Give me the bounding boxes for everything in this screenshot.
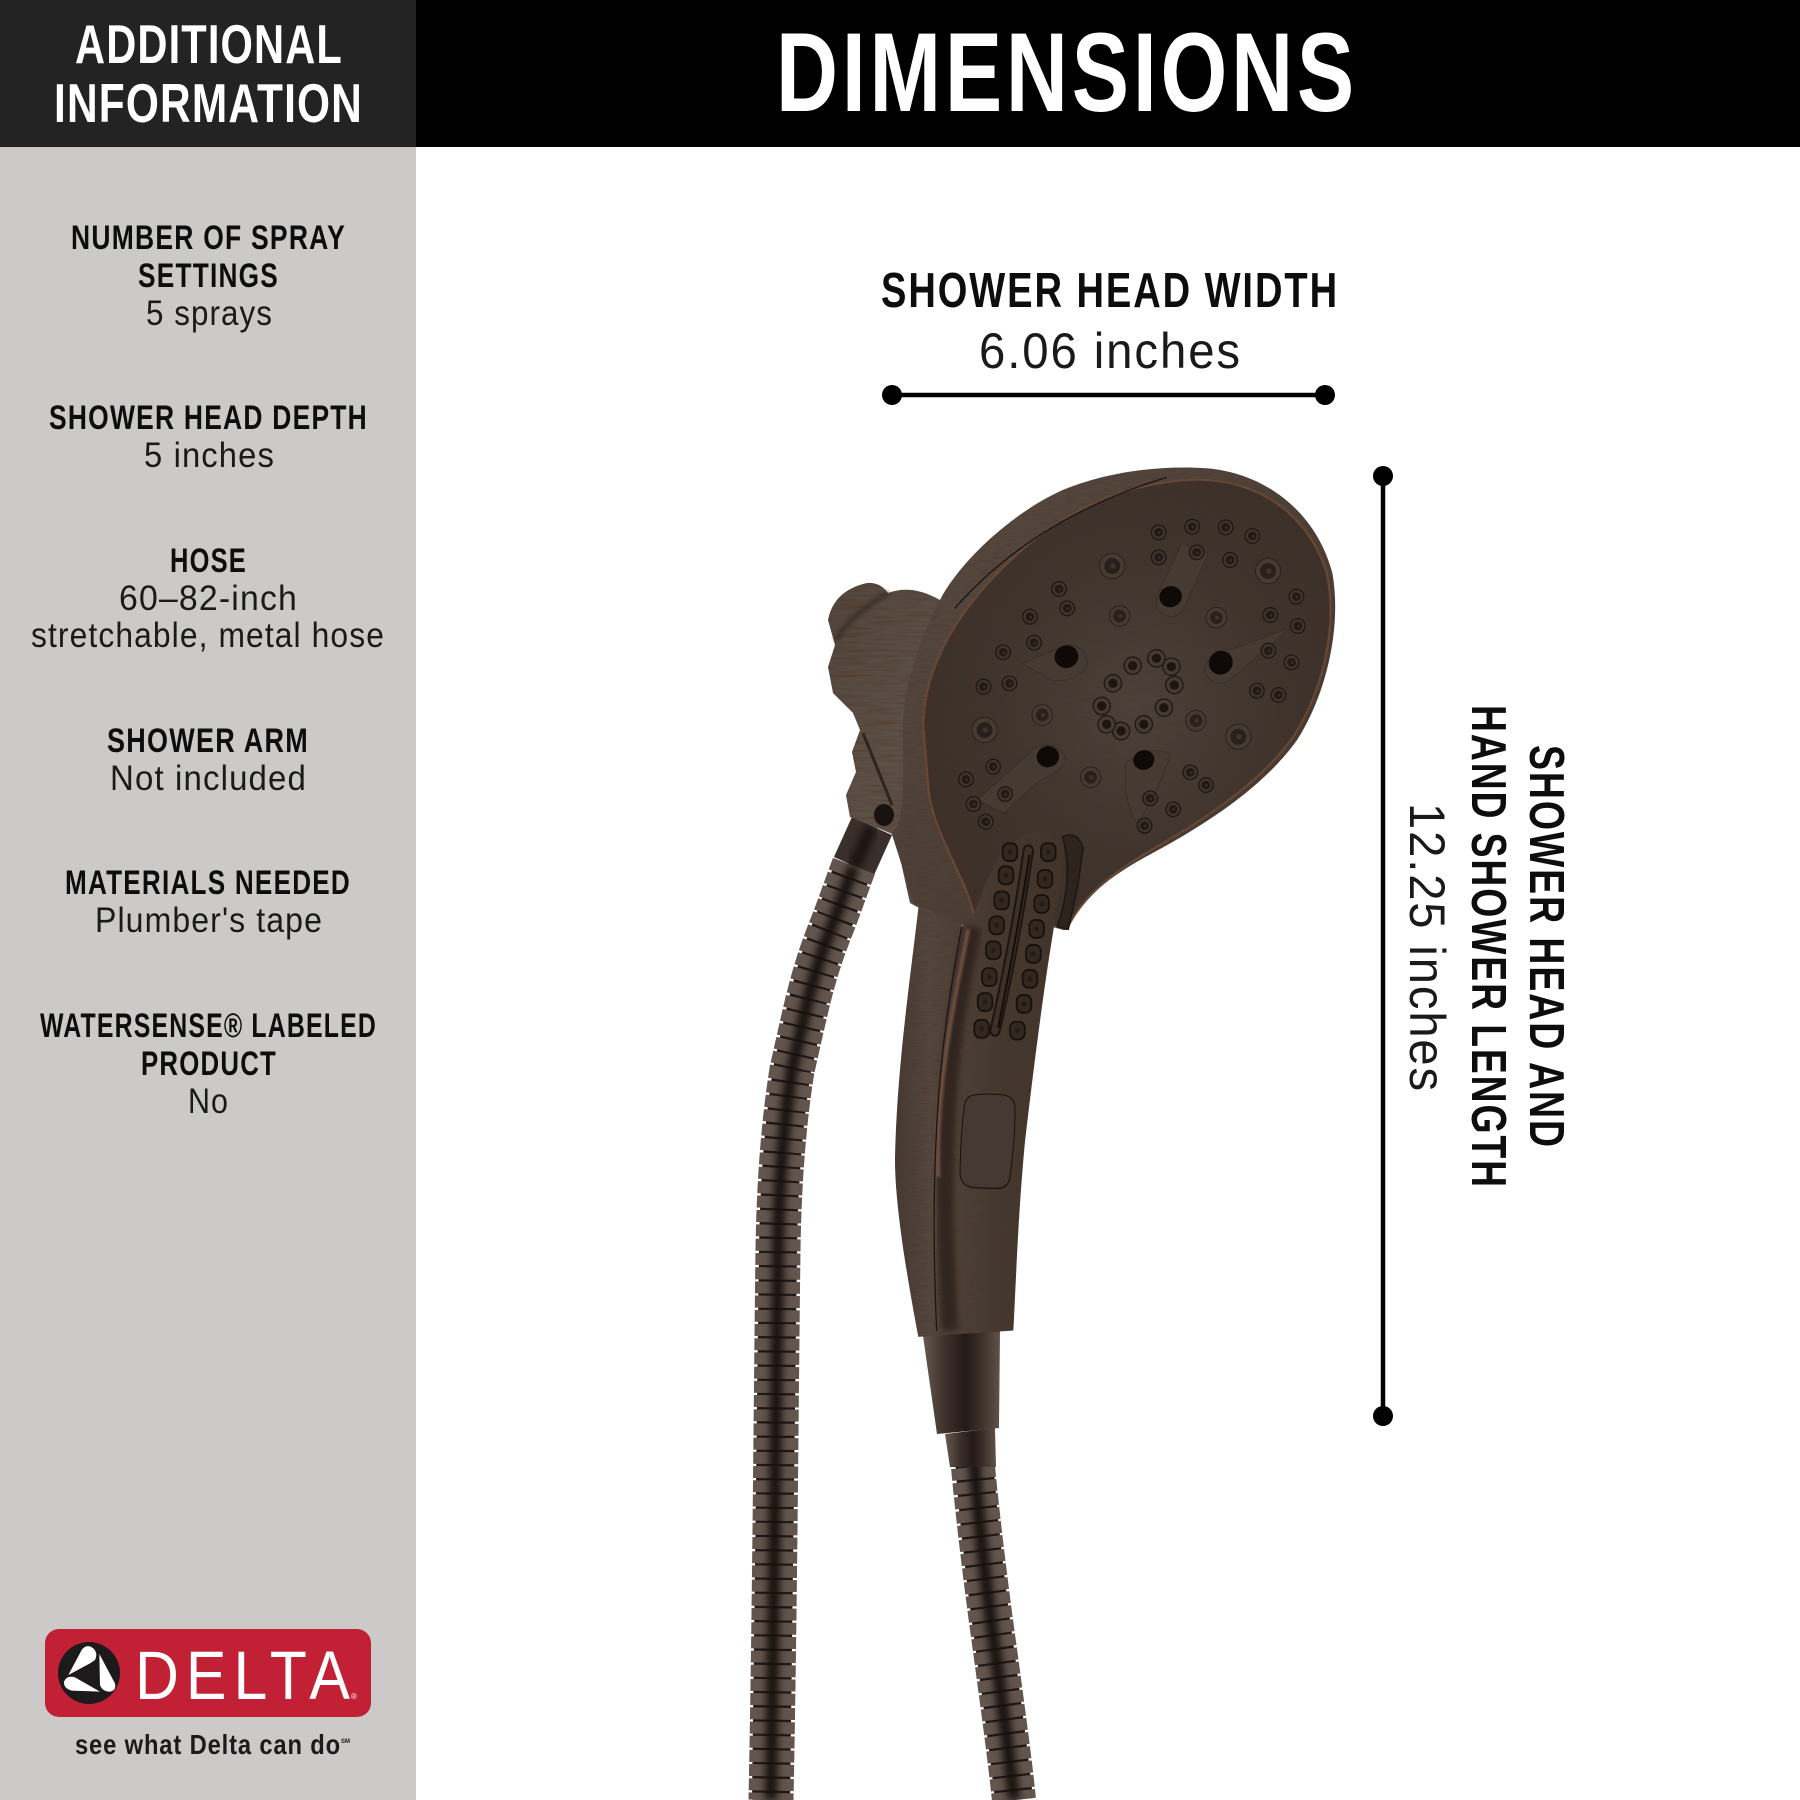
spec: shower head depth: 5 inches [144, 436, 275, 475]
title bar: dimensions [416, 0, 1800, 147]
width dimension label: SHOWER HEAD WIDTH [881, 264, 1339, 318]
arrow: width dimension line [882, 385, 1335, 405]
hand shower handle [895, 832, 1064, 1337]
handle button [960, 1094, 1015, 1188]
spray holes [1034, 583, 1235, 773]
spec: materials needed [65, 864, 351, 940]
mount bracket [828, 583, 1000, 930]
spec: number of spray settings: SETTINGS [138, 257, 279, 295]
spec: number of spray settings: NUMBER OF SPRAY [71, 219, 346, 257]
length dimension label: SHOWER HEAD AND [1519, 745, 1573, 1149]
head lower tab [1057, 835, 1083, 929]
right hose [973, 1440, 1014, 1800]
logo: delta [45, 1629, 371, 1760]
logo: delta: see what Delta can do [75, 1729, 341, 1760]
logo: delta: ® [351, 1692, 357, 1701]
spec: hose: 60–82-inch [119, 579, 298, 618]
spec: watersense labeled product: WATERSENSE® LABELED [40, 1007, 377, 1045]
width dimension label [881, 264, 1339, 379]
panel: additional information sidebar [0, 0, 416, 1800]
spec: materials needed: MATERIALS NEEDED [65, 864, 351, 902]
arrow: length dimension line [1373, 466, 1393, 1426]
spec: materials needed: Plumber's tape [95, 901, 323, 940]
spec: shower head depth [49, 399, 368, 475]
spec: hose [31, 542, 385, 655]
hose connector collars [923, 1330, 1000, 1467]
spec: shower arm: SHOWER ARM [107, 722, 309, 760]
nozzles [959, 519, 1305, 833]
length dimension label: HAND SHOWER LENGTH [1461, 705, 1515, 1189]
spec: shower head depth: SHOWER HEAD DEPTH [49, 399, 368, 437]
spec: number of spray settings: 5 sprays [146, 294, 273, 333]
title bar: dimensions: DIMENSIONS [776, 10, 1358, 135]
logo: delta: SM [341, 1739, 350, 1745]
width dimension label: 6.06 inches [979, 323, 1242, 379]
spec: shower arm [107, 722, 309, 798]
head shell and face [892, 468, 1335, 930]
shower head [892, 468, 1335, 930]
length dimension label: 12.25 inches [1399, 803, 1455, 1093]
heading: additional information: ADDITIONAL [75, 13, 343, 75]
spec: number of spray settings [71, 219, 346, 333]
spec: watersense labeled product: PRODUCT [141, 1045, 277, 1083]
heading: additional information: INFORMATION [54, 72, 363, 134]
face wedges [977, 543, 1290, 823]
handle spray panel [974, 843, 1056, 1040]
spec: hose: HOSE [170, 542, 247, 580]
logo: delta: DELTA [135, 1637, 357, 1714]
spec: shower arm: Not included [110, 759, 307, 798]
spec: watersense labeled product: No [188, 1082, 229, 1121]
left hose [771, 826, 872, 1800]
spec: hose: stretchable, metal hose [31, 616, 385, 655]
heading: additional information [0, 0, 416, 147]
length dimension label [1399, 705, 1573, 1189]
handle contour shading [945, 927, 973, 1331]
product: hand shower with hose [771, 468, 1335, 1800]
spec: watersense labeled product [40, 1007, 377, 1121]
